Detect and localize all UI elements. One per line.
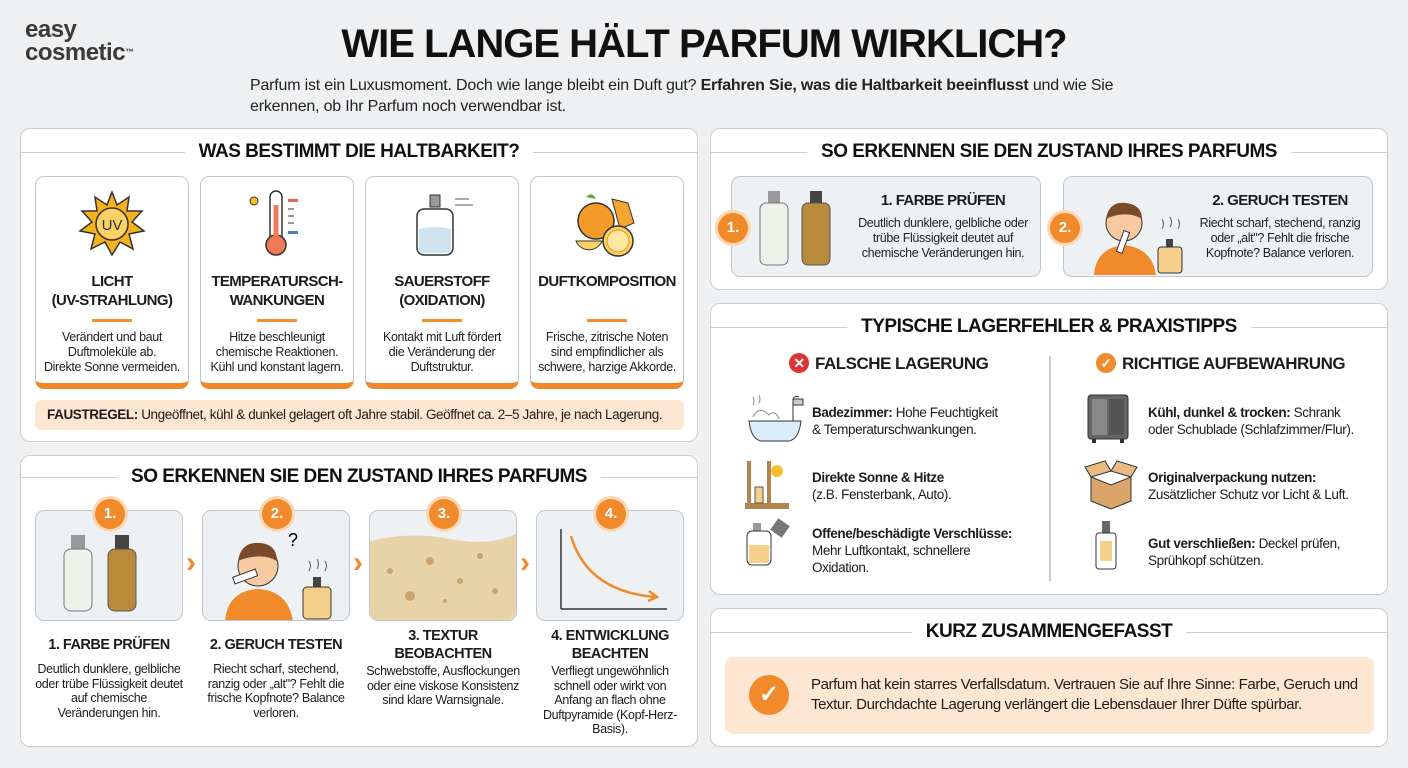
card: farbe: Deutlich dunklere, gelbliche oder trübe Flüssigkeit deutet auf chemische Veränderungen hin. — [858, 216, 1028, 260]
column: falsche lagerung: Badezimmer: Hohe Feuchtigkeit — [812, 405, 998, 420]
column: falsche lagerung: (z.B. Fensterbank, Auto). — [812, 487, 951, 502]
number 1 — [95, 499, 125, 529]
number 2 — [262, 499, 292, 529]
column: falsche lagerung: Oxidation. — [812, 560, 869, 575]
callout: faustregel — [35, 400, 684, 430]
column: richtige aufbewahrung: oder Schublade (Schlafzimmer/Flur). — [1148, 422, 1354, 437]
step 4 image — [536, 510, 684, 621]
icon: citrus — [575, 194, 635, 257]
panel: zustand steps: Deutlich dunklere, gelbliche oder trübe Flüssigkeit deutet auf chemische Veränderungen hin. — [35, 662, 183, 720]
number 3 — [429, 499, 459, 529]
arrow: › — [353, 546, 363, 579]
column: falsche lagerung: & Temperaturschwankungen. — [812, 422, 977, 437]
number 2: 2. — [1059, 219, 1071, 236]
card: geruch — [1063, 176, 1373, 277]
card: sauerstoff: (OXIDATION) — [399, 292, 485, 309]
card: duftkomposition: schwere, harzige Akkorde. — [538, 360, 676, 374]
panel: zustand steps: 3. TEXTUR — [408, 628, 478, 644]
icon: spray bottle — [416, 194, 473, 256]
icon: bathtub — [748, 394, 804, 442]
subtitle: Parfum ist ein Luxusmoment. Doch wie lange bleibt ein Duft gut? Erfahren Sie, was die Haltbarkeit beeinflusst und wie Sie erkennen, ob Ihr Parfum noch verwendbar ist. — [250, 77, 1113, 115]
callout: summary — [725, 657, 1374, 734]
panel: zustand steps: Riecht scharf, stechend, ranzig oder „alt"? Fehlt die frische Kopfnote? Balance verloren. — [207, 662, 345, 720]
card: licht — [35, 176, 189, 389]
heading: SO ERKENNEN SIE DEN ZUSTAND IHRES PARFUMS — [131, 466, 587, 487]
icon: check — [749, 675, 789, 715]
card: sauerstoff: Kontakt mit Luft fördert — [383, 330, 501, 344]
card: sauerstoff: die Veränderung der — [389, 345, 495, 359]
subheading: ✓ — [1100, 355, 1112, 371]
logo: cosmetic™ — [25, 39, 134, 66]
number 2 — [1050, 213, 1080, 243]
step 2 image: ? — [288, 530, 298, 550]
card: duftkomposition: sind empfindlicher als — [551, 345, 663, 359]
column: falsche lagerung: Direkte Sonne & Hitze — [812, 470, 944, 485]
divider — [1049, 356, 1050, 581]
card: temperatur: TEMPERATURSCH- — [211, 273, 343, 290]
panel: zustand steps: Verfliegt ungewöhnlich schnell oder wirkt von Anfang an flach ohne Duftpyramide (Kopf-Herz-Basis). — [543, 664, 677, 736]
title: WIE LANGE HÄLT PARFUM WIRKLICH? — [341, 22, 1067, 66]
panel: zustand steps — [20, 455, 698, 747]
panel: zustand steps: 4. ENTWICKLUNG — [551, 628, 669, 644]
icon: sun uv: UV — [102, 217, 122, 234]
column: falsche lagerung: Offene/beschädigte Verschlüsse: — [812, 526, 1012, 541]
number 3: 3. — [438, 505, 450, 522]
number 4 — [596, 499, 626, 529]
column: falsche lagerung: Mehr Luftkontakt, schnellere — [812, 543, 970, 558]
card: farbe: 1. FARBE PRÜFEN — [881, 192, 1005, 209]
card: geruch: 2. GERUCH TESTEN — [1212, 192, 1348, 209]
subheading: FALSCHE LAGERUNG — [815, 354, 988, 373]
card: sauerstoff — [365, 176, 519, 389]
card: temperatur: Hitze beschleunigt — [229, 330, 325, 344]
panel: zusammenfassung — [710, 608, 1388, 747]
panel: zustand steps: 2. GERUCH TESTEN — [210, 637, 342, 653]
column: richtige aufbewahrung: Zusätzlicher Schutz vor Licht & Luft. — [1148, 487, 1349, 502]
icon: sun uv — [78, 190, 146, 256]
card: farbe — [731, 176, 1041, 277]
card: licht: LICHT — [91, 273, 133, 290]
card: geruch: Riecht scharf, stechend, ranzig oder „alt"? Fehlt die frische Kopfnote? Balance verloren. — [1200, 216, 1360, 260]
number 1 — [718, 213, 748, 243]
panel: haltbarkeit — [20, 128, 698, 442]
card: sauerstoff: Duftstruktur. — [411, 360, 473, 374]
card: licht: Direkte Sonne vermeiden. — [44, 360, 180, 374]
card: duftkomposition — [530, 176, 684, 389]
callout: summary: Parfum hat kein starres Verfallsdatum. Vertrauen Sie auf Ihre Sinne: Farbe, Geruch und Textur. Durchdachte Lagerung verlängert die Lebensdauer Ihrer Düfte spürbar. — [811, 676, 1358, 713]
callout: faustregel: FAUSTREGEL: Ungeöffnet, kühl & dunkel gelagert oft Jahre stabil. Geöffnet ca. 2–5 Jahre, je nach Lagerung. — [47, 407, 662, 422]
logo: easy — [25, 16, 76, 43]
step 1 image — [35, 510, 183, 621]
number 1: 1. — [104, 505, 116, 522]
arrow: › — [520, 546, 530, 579]
subheading: ✕ — [793, 355, 805, 371]
card: temperatur: chemische Reaktionen. — [216, 345, 338, 359]
number 1: 1. — [727, 219, 739, 236]
icon: window sun — [745, 461, 789, 509]
card: licht: (UV-STRAHLUNG) — [52, 292, 172, 309]
step texts: 1. FARBE PRÜFEN — [48, 637, 170, 653]
card: temperatur — [200, 176, 354, 389]
step 3 image — [369, 510, 517, 621]
icon: cabinet — [1088, 394, 1128, 443]
subheading: RICHTIGE AUFBEWAHRUNG — [1122, 354, 1345, 373]
card: temperatur: WANKUNGEN — [230, 292, 324, 309]
number 4: 4. — [605, 505, 617, 522]
panel: zustand steps: BEACHTEN — [572, 646, 648, 662]
column: richtige aufbewahrung — [1084, 353, 1354, 570]
heading: TYPISCHE LAGERFEHLER & PRAXISTIPPS — [861, 316, 1237, 337]
number 2: 2. — [271, 505, 283, 522]
column: richtige aufbewahrung: Originalverpackung nutzen: — [1148, 470, 1316, 485]
card: licht: Verändert und baut — [62, 330, 162, 344]
panel: lagerfehler — [710, 303, 1388, 595]
logo — [25, 16, 134, 66]
card: sauerstoff: SAUERSTOFF — [394, 273, 490, 290]
icon: open bottle — [746, 518, 790, 566]
panel: zustand steps: BEOBACHTEN — [394, 646, 492, 662]
heading: KURZ ZUSAMMENGEFASST — [926, 621, 1172, 642]
card: temperatur: Kühl und konstant lagern. — [210, 360, 344, 374]
panel: zustand right — [710, 128, 1388, 290]
icon: check: ✓ — [759, 681, 779, 708]
panel: zustand steps: Schwebstoffe, Ausflockungen oder eine viskose Konsistenz sind klare Warnsignale. — [366, 664, 520, 707]
column: richtige aufbewahrung: Gut verschließen: Deckel prüfen, — [1148, 536, 1340, 551]
card: duftkomposition: DUFTKOMPOSITION — [538, 273, 676, 290]
column: falsche lagerung — [745, 353, 1012, 575]
column: richtige aufbewahrung: Sprühkopf schützen. — [1148, 553, 1263, 568]
step 2 image — [202, 510, 350, 621]
column: richtige aufbewahrung: Kühl, dunkel & trocken: Schrank — [1148, 405, 1340, 420]
icon: closed bottle — [1096, 521, 1116, 570]
heading: SO ERKENNEN SIE DEN ZUSTAND IHRES PARFUMS — [821, 141, 1277, 162]
heading: WAS BESTIMMT DIE HALTBARKEIT? — [199, 141, 519, 162]
icon: thermometer — [250, 190, 298, 256]
card: duftkomposition: Frische, zitrische Noten — [546, 330, 668, 344]
card: licht: Duftmoleküle ab. — [68, 345, 156, 359]
icon: box — [1084, 460, 1138, 510]
arrow: › — [186, 546, 196, 579]
